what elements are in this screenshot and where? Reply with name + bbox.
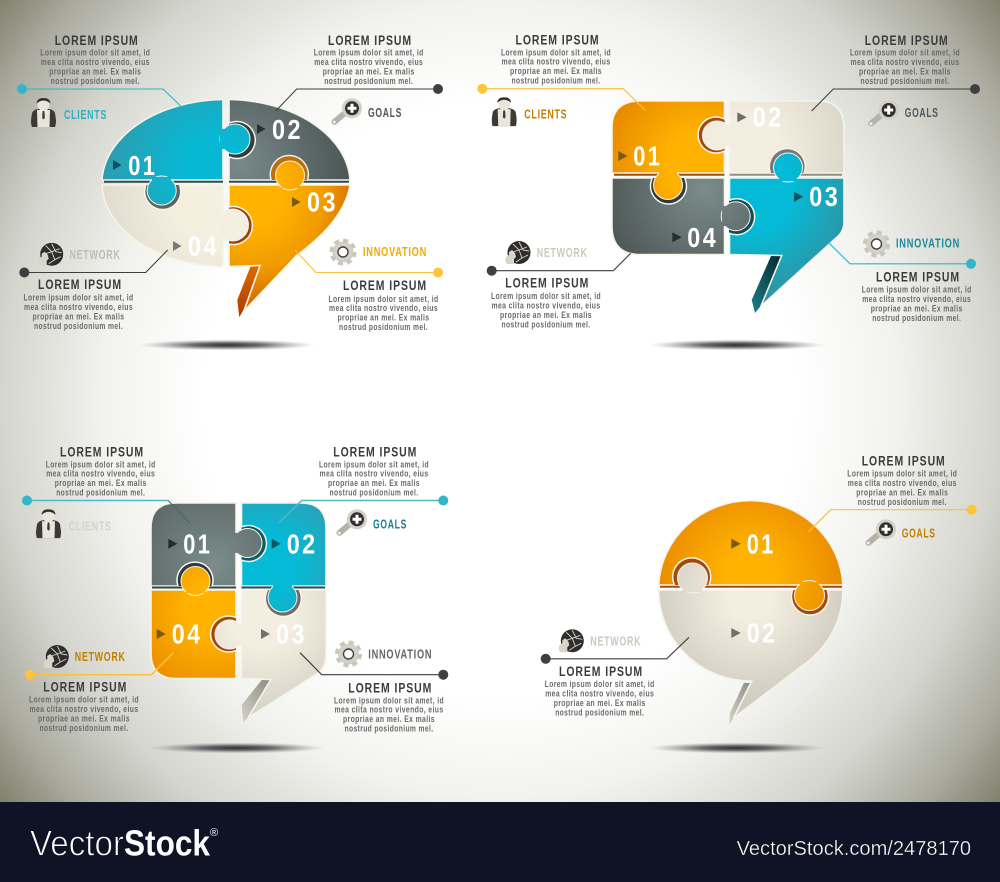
piece 03	[242, 590, 326, 718]
text block top right: propriae an mei. Ex malis	[859, 66, 951, 76]
text block top left: nostrud posidonium mel.	[51, 76, 140, 86]
numbers	[113, 114, 338, 262]
text block top right: propriae an mei. Ex malis	[323, 66, 415, 76]
socket rings	[673, 558, 829, 615]
knobs	[232, 528, 262, 558]
text block bottom left: LOREM IPSUM	[559, 664, 643, 679]
knobs	[220, 124, 250, 154]
numbers	[618, 102, 840, 253]
text block bottom left: Lorem ipsum dolor sit amet, id	[24, 293, 134, 303]
text block top right: LOREM IPSUM	[333, 444, 417, 459]
text block bottom left: nostrud posidonium mel.	[502, 319, 590, 329]
text block top right: mea clita nostro vivendo, eius	[320, 469, 428, 479]
bottom strip	[660, 586, 842, 588]
label: network: NETWORK	[537, 246, 588, 260]
text block top right	[314, 33, 424, 86]
shadow	[149, 742, 325, 754]
text block bottom right: mea clita nostro vivendo, eius	[862, 294, 971, 304]
text block top left: mea clita nostro vivendo, eius	[46, 469, 155, 479]
piece 04	[151, 590, 236, 678]
text block bottom left: Lorem ipsum dolor sit amet, id	[545, 679, 655, 689]
label: clients: CLIENTS	[524, 108, 567, 122]
label: clients: CLIENTS	[69, 520, 112, 534]
text block bottom left: nostrud posidonium mel.	[555, 707, 644, 717]
leader: network	[25, 653, 173, 680]
text block bottom right: mea clita nostro vivendo, eius	[334, 705, 444, 715]
leader: innovation	[295, 250, 443, 278]
tail fold 03	[752, 256, 782, 313]
leader: goals	[812, 84, 980, 111]
text block top right: Lorem ipsum dolor sit amet, id	[314, 48, 424, 58]
text block bottom left	[24, 277, 134, 331]
label: innovation: INNOVATION	[368, 647, 432, 661]
text block bottom right: propriae an mei. Ex malis	[871, 304, 963, 314]
leader: network	[487, 253, 631, 276]
panel: four-piece square speech bubble, bottom left	[22, 444, 448, 754]
text block bottom right: nostrud posidonium mel.	[339, 322, 428, 332]
numbers: 04	[188, 231, 219, 262]
text block top right: Lorem ipsum dolor sit amet, id	[847, 469, 957, 479]
text block bottom right: propriae an mei. Ex malis	[338, 312, 430, 322]
numbers: 02	[287, 529, 318, 560]
bubble puzzle	[102, 100, 350, 317]
label: innovation: INNOVATION	[363, 245, 427, 259]
numbers: 03	[809, 181, 840, 212]
numbers: 01	[128, 150, 157, 181]
text block top left: LOREM IPSUM	[55, 33, 139, 48]
panel: two-piece round speech bubble, bottom right	[541, 453, 977, 754]
logo: Vector	[30, 823, 124, 864]
numbers	[731, 528, 778, 648]
leader: network	[19, 250, 168, 278]
text block top left	[40, 33, 150, 86]
panel: four-piece oval speech bubble	[17, 33, 443, 350]
text block top left: Lorem ipsum dolor sit amet, id	[40, 48, 150, 58]
piece 02	[229, 100, 350, 180]
bottom strip 01	[614, 174, 724, 176]
shadow	[649, 742, 825, 754]
icon: innovation gear	[332, 240, 354, 264]
bottom strips	[104, 181, 349, 183]
text block top right	[319, 444, 429, 498]
text block top right: LOREM IPSUM	[328, 33, 412, 48]
text block bottom left: LOREM IPSUM	[43, 680, 127, 695]
leader: clients	[22, 496, 190, 523]
text block bottom right: LOREM IPSUM	[348, 680, 432, 695]
panel: four-piece rounded speech bubble, top right	[477, 32, 980, 350]
knobs	[702, 121, 732, 150]
text block top right: mea clita nostro vivendo, eius	[850, 57, 960, 67]
text block bottom left: propriae an mei. Ex malis	[500, 310, 592, 320]
text block bottom left: LOREM IPSUM	[38, 277, 122, 292]
numbers: 02	[747, 617, 778, 648]
text block top left: nostrud posidonium mel.	[512, 76, 600, 86]
text block top left	[501, 32, 611, 86]
text block top right: nostrud posidonium mel.	[330, 488, 418, 498]
text block top left: LOREM IPSUM	[516, 32, 600, 48]
tail fold 03	[237, 265, 260, 317]
numbers: 01	[183, 529, 212, 560]
numbers: 04	[172, 618, 203, 649]
leader: goals	[278, 496, 448, 523]
icon: innovation gear	[337, 642, 360, 666]
text block top right: propriae an mei. Ex malis	[328, 478, 420, 488]
text block bottom right: LOREM IPSUM	[876, 270, 960, 285]
text block bottom left: propriae an mei. Ex malis	[32, 312, 124, 322]
text block bottom left: nostrud posidonium mel.	[34, 321, 123, 331]
label: clients: CLIENTS	[64, 108, 107, 122]
bottom strips	[152, 586, 325, 588]
text block bottom left: propriae an mei. Ex malis	[554, 698, 646, 708]
text block bottom left: mea clita nostro vivendo, eius	[492, 300, 600, 310]
text block top left: Lorem ipsum dolor sit amet, id	[501, 47, 611, 57]
text block bottom right: nostrud posidonium mel.	[872, 313, 961, 323]
icon: network	[505, 241, 530, 264]
text block top right: nostrud posidonium mel.	[324, 76, 413, 86]
numbers: 04	[687, 222, 718, 253]
text block top left: propriae an mei. Ex malis	[510, 66, 602, 76]
icon: clients person	[492, 97, 517, 126]
text block top left: Lorem ipsum dolor sit amet, id	[46, 459, 156, 469]
text block top right	[850, 33, 960, 86]
image id: VectorStock.com/2478170	[737, 838, 971, 860]
icon: network	[38, 243, 63, 266]
text block bottom right: propriae an mei. Ex malis	[343, 714, 435, 724]
leader: goals	[276, 84, 443, 111]
text block top right: LOREM IPSUM	[862, 453, 946, 468]
label: network: NETWORK	[75, 650, 126, 664]
tail fold 02	[729, 683, 752, 725]
text block bottom left: Lorem ipsum dolor sit amet, id	[29, 695, 139, 705]
text block top left: mea clita nostro vivendo, eius	[502, 57, 610, 67]
text block top left	[46, 444, 156, 498]
piece 03	[229, 185, 350, 311]
icon: network	[43, 645, 69, 668]
icon: clients person	[31, 98, 56, 127]
shadow	[649, 340, 825, 350]
leader: innovation	[300, 653, 448, 680]
tail fold 03	[242, 680, 271, 723]
leader: clients	[17, 84, 182, 107]
numbers: 03	[307, 187, 338, 218]
icon: clients person	[36, 509, 61, 538]
text block top right: nostrud posidonium mel.	[858, 497, 947, 507]
text block bottom right: mea clita nostro vivendo, eius	[329, 303, 438, 313]
label: network: NETWORK	[590, 634, 641, 648]
socket rings	[650, 117, 805, 235]
leader: goals	[809, 505, 977, 532]
label: goals: GOALS	[905, 106, 939, 120]
text block top left: mea clita nostro vivendo, eius	[41, 57, 150, 67]
bubble puzzle	[151, 503, 326, 723]
piece 01	[151, 503, 236, 586]
text block bottom left: mea clita nostro vivendo, eius	[30, 704, 138, 714]
numbers: 01	[747, 528, 776, 559]
label: goals: GOALS	[373, 517, 407, 531]
text block top right: propriae an mei. Ex malis	[856, 488, 948, 498]
piece 02	[242, 503, 326, 586]
piece 01	[612, 101, 724, 173]
icon: goals magnifier	[867, 519, 896, 544]
icon: goals magnifier	[338, 509, 367, 534]
leader: clients	[477, 84, 646, 111]
label: innovation: INNOVATION	[896, 236, 960, 250]
text block bottom left: propriae an mei. Ex malis	[38, 714, 130, 724]
text block top left: nostrud posidonium mel.	[56, 488, 145, 498]
bottom strip 02	[730, 174, 842, 176]
numbers: 02	[753, 102, 784, 133]
text block bottom right: Lorem ipsum dolor sit amet, id	[334, 695, 444, 705]
text block bottom left: mea clita nostro vivendo, eius	[24, 302, 133, 312]
text block top right: Lorem ipsum dolor sit amet, id	[850, 48, 960, 58]
text block bottom left	[545, 664, 655, 717]
text block top right: LOREM IPSUM	[865, 33, 949, 48]
label: goals: GOALS	[902, 526, 936, 540]
piece 01	[102, 100, 223, 180]
bubble puzzle	[659, 501, 843, 725]
text block bottom right	[334, 680, 444, 734]
icon: goals magnifier	[870, 100, 899, 125]
text block bottom right: Lorem ipsum dolor sit amet, id	[328, 294, 438, 304]
bubble puzzle	[612, 101, 844, 313]
leader: innovation	[828, 242, 976, 269]
text block top right: mea clita nostro vivendo, eius	[848, 478, 957, 488]
icon: innovation gear	[865, 232, 888, 256]
piece 04	[102, 185, 223, 266]
logo: ®	[210, 827, 218, 839]
numbers: 01	[633, 141, 662, 172]
leader: network	[541, 637, 689, 664]
label: goals: GOALS	[368, 106, 402, 120]
text block bottom left	[29, 680, 139, 733]
logo: Stock	[124, 823, 211, 864]
text block bottom left: mea clita nostro vivendo, eius	[545, 688, 654, 698]
text block top right: mea clita nostro vivendo, eius	[314, 57, 423, 67]
text block bottom right: LOREM IPSUM	[343, 278, 427, 293]
text block top right: Lorem ipsum dolor sit amet, id	[319, 459, 429, 469]
numbers	[157, 529, 318, 649]
text block bottom right	[862, 270, 972, 323]
piece 02	[730, 101, 844, 173]
piece 04	[612, 178, 724, 254]
socket rings	[177, 526, 301, 652]
shadow	[139, 340, 315, 350]
text block bottom right	[328, 278, 438, 332]
numbers: 02	[272, 114, 303, 145]
piece 01	[659, 501, 843, 585]
text block top left: LOREM IPSUM	[60, 444, 144, 459]
socket rings	[145, 121, 308, 245]
icon: goals magnifier	[333, 98, 362, 123]
piece 02	[659, 590, 843, 718]
text block bottom left: Lorem ipsum dolor sit amet, id	[491, 291, 601, 301]
icon: network	[558, 629, 584, 652]
numbers: 03	[276, 618, 307, 649]
text block top left: propriae an mei. Ex malis	[49, 66, 141, 76]
text block top left: propriae an mei. Ex malis	[55, 478, 147, 488]
label: network: NETWORK	[70, 248, 120, 262]
footer bar	[0, 802, 1000, 882]
piece 03	[730, 178, 844, 306]
text block bottom left: nostrud posidonium mel.	[40, 723, 128, 733]
text block bottom right: nostrud posidonium mel.	[344, 724, 434, 734]
knobs	[678, 563, 708, 593]
text block bottom left	[491, 276, 601, 329]
text block bottom left: LOREM IPSUM	[505, 276, 589, 291]
text block top right	[847, 453, 957, 507]
text block top right: nostrud posidonium mel.	[860, 76, 950, 86]
